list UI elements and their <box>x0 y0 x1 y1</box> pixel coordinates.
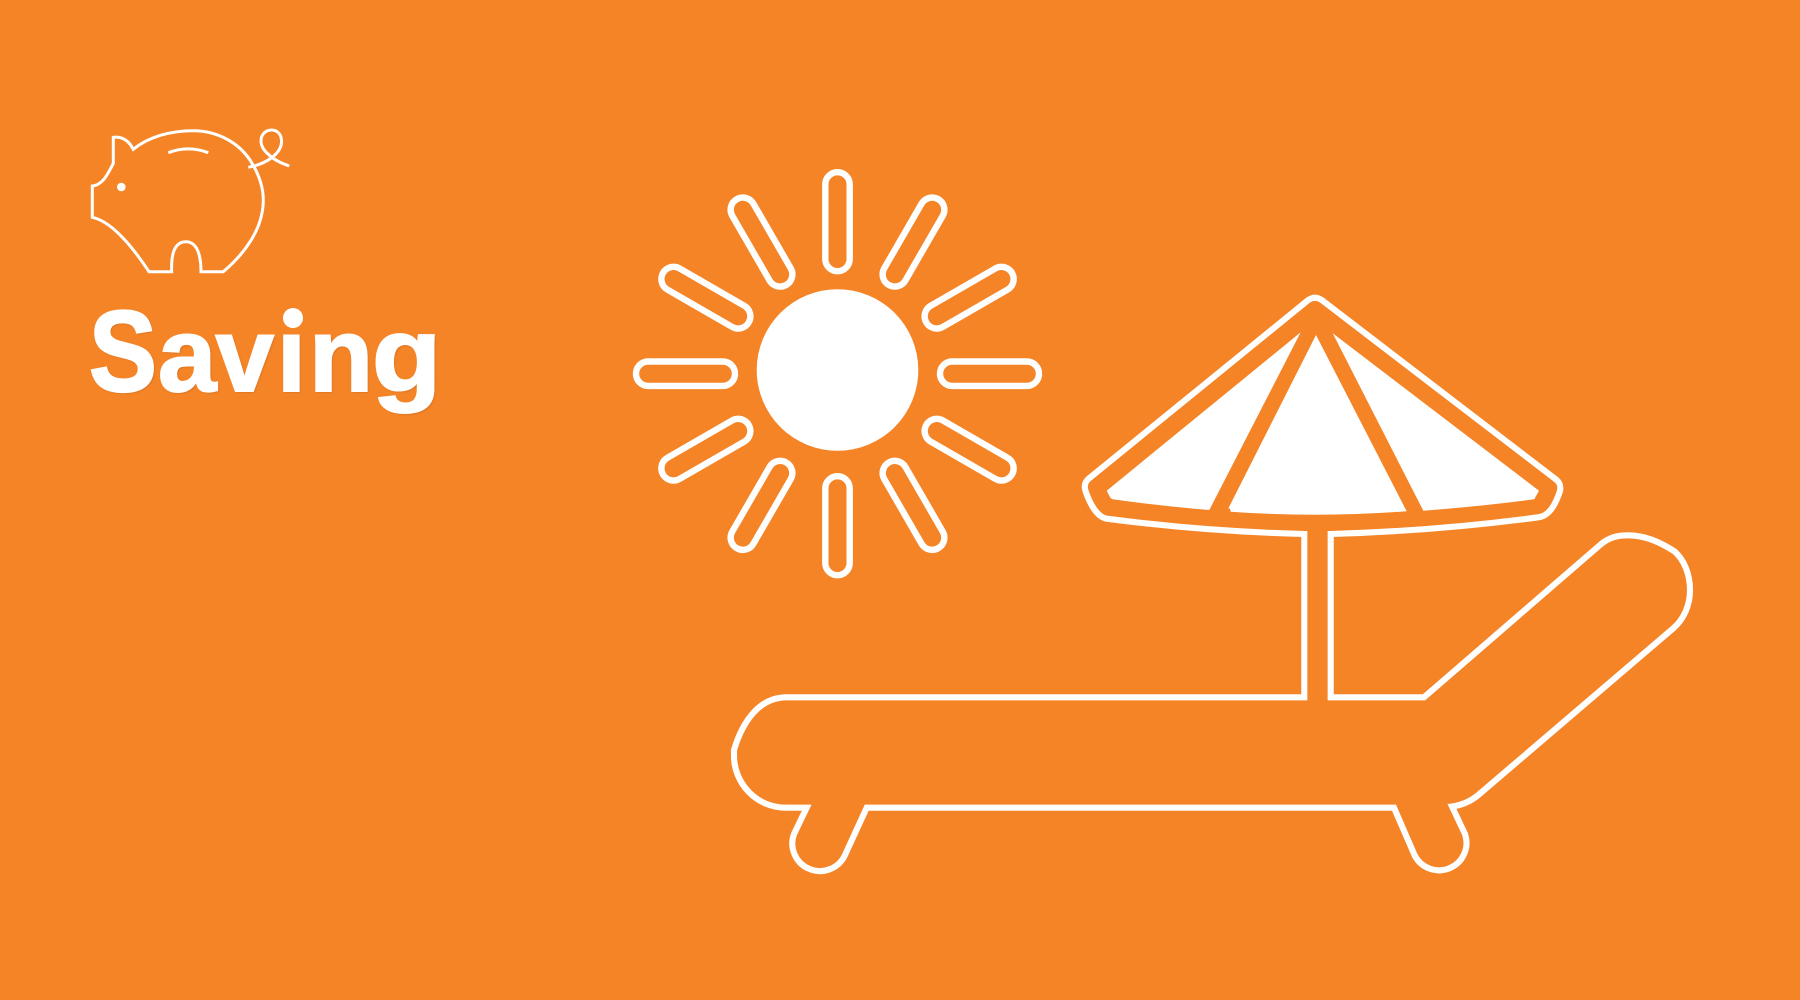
piggy body outline <box>92 131 263 272</box>
title: Saving: i <box>277 296 306 414</box>
icon: sun lounger with parasol <box>734 298 1690 871</box>
icon: sun <box>636 172 1039 575</box>
parasol left panel <box>1107 332 1301 510</box>
piggy eye <box>117 183 126 191</box>
sun rays <box>636 172 1039 575</box>
lounger and parasol outline <box>734 298 1690 871</box>
title i-dot <box>283 308 303 328</box>
parasol right panel <box>1333 333 1539 511</box>
title: Saving <box>89 287 441 416</box>
icon: piggy bank <box>92 130 289 272</box>
title: Saving: g <box>372 296 441 414</box>
title: Saving: v <box>215 296 274 414</box>
parasol centre panel <box>1228 335 1407 515</box>
title: Saving: a <box>158 296 216 414</box>
title i-dot mask <box>280 303 306 330</box>
title: Saving: S <box>89 287 157 416</box>
piggy coin slot <box>168 149 208 153</box>
title: Saving: n <box>309 296 373 414</box>
piggy tail <box>248 130 289 167</box>
sun disc <box>757 289 918 451</box>
